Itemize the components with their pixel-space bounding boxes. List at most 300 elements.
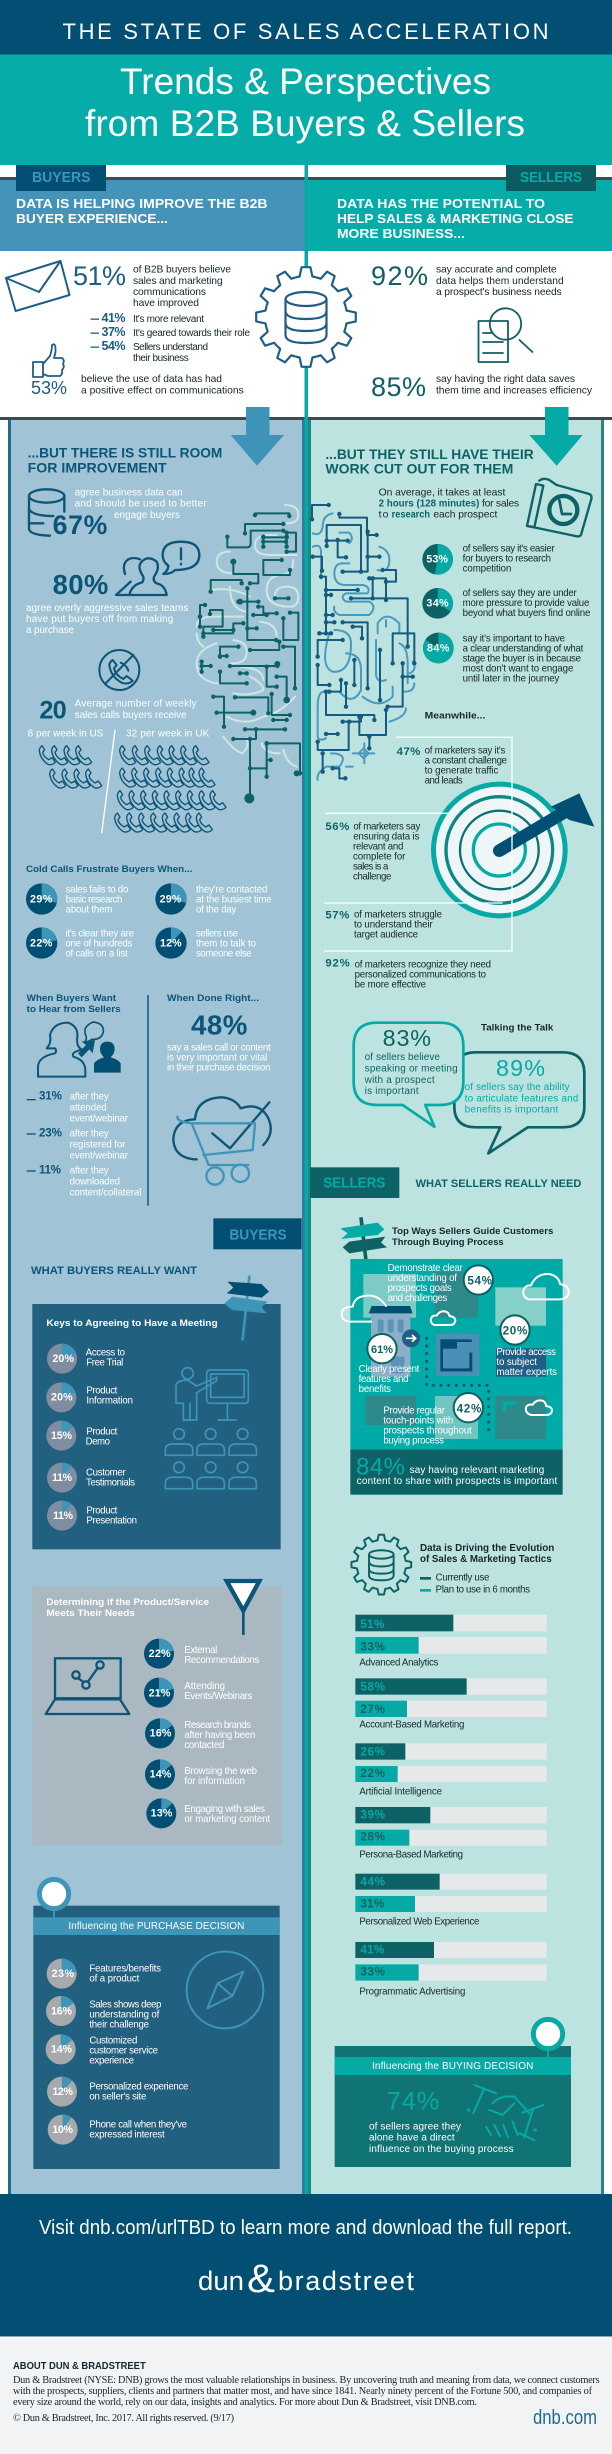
list: when to hear from sellers: event/webinar [70,1150,129,1161]
text: demonstrate understanding: and challenges [388,1293,448,1304]
pie: attending events: Events/Webinars [184,1691,253,1702]
pie: browsing the web: Browsing the web [184,1766,257,1777]
pie: deep understanding: Sales shows deep [89,2000,161,2011]
stat: 74 percent [369,2087,514,2155]
breakdown list: 54% [102,339,126,353]
bars: programmatic advertising: 41% [360,1944,385,1957]
about section: with the prospects, suppliers, clients and partners that matter most, and have since 1841. Nearly ninety percent of the Fortune 500, and companies of [13,2386,593,2397]
panel: influencing purchase decision [33,1879,280,2169]
strip: 84 percent: content to share with prospects is important [357,1476,558,1487]
pie: attending events [144,1678,253,1708]
stat: 20 weekly calls: 32 per week in UK [126,729,210,740]
stat: 57 percent: target audience [354,930,418,941]
icon: signpost teal [340,1217,387,1261]
heading: room for improvement: FOR IMPROVEMENT [28,460,167,476]
pie: 84 percent: 84% [427,642,450,654]
heading: when done right: When Done Right... [167,993,259,1003]
pie: 29 percent busiest [155,883,272,916]
title banner: from B2B Buyers & Sellers [85,103,525,144]
breakdown list: their business [133,353,189,364]
stat: 56 percent: ensuring data is [353,832,420,843]
badge: 61 percent: 61% [371,1344,393,1356]
icon: database [29,489,64,536]
pie: features: of a product [89,1974,140,1985]
stat: 67 percent: and should be used to better [75,499,207,510]
stat: 85 percent sellers: say having the right data saves [436,374,575,385]
icon: no calls [99,650,139,690]
icon: building [369,1306,413,1377]
pie: 22 percent list: of calls on a list [65,949,128,960]
navy label background [496,1348,546,1377]
heading: data driving evolution: of Sales & Marketing Tactics [420,1554,552,1565]
badge: 54 percent: 54% [467,1275,493,1288]
stat: 92 percent sellers: a prospect's business needs [436,287,562,298]
pie: product presentation: Product [86,1506,118,1517]
speech bubble: 89 percent: 89% [496,1055,545,1081]
bars: account-based marketing: Account-Based Marketing [359,1720,464,1731]
speech bubble: 83 percent: of sellers believe [365,1052,440,1063]
icon: target with dart [431,782,594,918]
pie: 53 percent [422,544,555,575]
pie: personalized site: Personalized experience [89,2082,188,2093]
dotted route [427,1338,489,1432]
stat: 74 percent: alone have a direct [369,2133,455,2144]
pie: external recommendations: 22% [149,1648,171,1660]
icons: 8 phones US [39,746,102,788]
panel: keys to meeting [32,1277,281,1549]
bars: artificial intelligence: 26% [360,1746,386,1759]
speech bubble: 89 percent: of sellers say the ability [465,1082,570,1093]
research time text: for sales [482,499,519,510]
research time text: to [379,510,389,521]
pie: research brands: contacted [184,1740,224,1751]
text: regular touch-points: buying process [383,1435,444,1446]
stat: 85 percent sellers: them time and increases efficiency [436,386,593,397]
stat: 74 percent: 74% [387,2087,439,2115]
text: regular touch-points: Provide regular [383,1405,446,1416]
pie: 29 percent busiest: they're contacted [196,885,267,896]
stat: 53 percent: believe the use of data has had [81,374,222,385]
stat: 47 percent: to generate traffic [425,766,499,777]
stat: 20 weekly calls [28,696,210,740]
stat: 56 percent [325,821,421,883]
list: when to hear from sellers: 31% [39,1089,63,1102]
pie: 53 percent: 53% [426,554,449,566]
bars: personalized web experience: Personalized Web Experience [359,1917,479,1928]
tag: buyers [213,1218,302,1249]
pie: 53 percent: competition [463,564,511,575]
stat: 51 percent buyers: have improved [133,298,199,309]
sellers heading band: DATA HAS THE POTENTIAL TO [337,196,545,211]
pie: 22 percent list [26,927,134,960]
stat: 56 percent: sales is a [353,862,389,873]
breakdown list [90,311,250,364]
icon: gear with database [256,267,356,367]
pie: 29 percent busiest: at the busiest time [196,895,272,906]
bars: artificial intelligence [355,1743,547,1798]
header: state of sales acceleration [0,0,612,54]
about section: dnb.com [533,2407,597,2429]
stat: 47 percent: a constant challenge [425,756,507,767]
icon: cloud and shopping cart [173,1097,271,1185]
pie: deep understanding [46,1996,161,2031]
icon: funnel sign [227,1581,259,1635]
pie: 34 percent: of sellers say they are under [463,588,577,599]
list: when to hear from sellers: registered for [70,1139,126,1150]
breakdown list: Sellers understand [133,342,208,353]
stat: 57 percent: of marketers struggle [354,910,442,921]
text: clearly present [359,1364,420,1395]
stat: 92 percent: of marketers recognize they need [355,960,491,971]
badge: 61 percent [367,1334,397,1363]
bars: personalized web experience: 44% [360,1876,386,1889]
strip: 84 percent: 84% [356,1453,405,1480]
heading: when buyers want to hear [27,993,121,1014]
list: when to hear from sellers [27,1089,141,1198]
pie: product information: Information [86,1396,133,1407]
stat: 53 percent: a positive effect on communications [81,386,244,397]
bars: account-based marketing [355,1678,547,1731]
stat: 67 percent: engage buyers [114,510,180,521]
pie: 84 percent: most don't want to engage [463,664,573,675]
badge: 20 percent [500,1315,530,1345]
pie: 29 percent research [26,883,128,916]
pie: features: Features/benefits [89,1964,161,1975]
breakdown list: It's geared towards their role [133,328,250,339]
icons: 32 phones UK [115,746,226,832]
strip: 84 percent: say having relevant marketing [410,1465,544,1476]
text: demonstrate understanding: understanding of [388,1273,457,1284]
heading: when buyers want to hear: to Hear from Sellers [27,1004,121,1014]
stat: 92 percent sellers [371,261,564,298]
pie: personalized site: on seller's site [89,2092,146,2103]
pie: browsing the web [145,1759,257,1789]
heading: top ways: Through Buying Process [392,1237,504,1247]
sellers heading band [308,165,612,251]
about section: Dun & Bradstreet (NYSE: DNB) grows the most valuable relationships in business. By uncovering truth and meaning from data, we connect customers [13,2375,600,2386]
stat: 92 percent sellers: data helps them understand [436,276,564,287]
bars: programmatic advertising: 33% [360,1966,386,1979]
stat: 51 percent buyers: communications [133,287,206,298]
header: state of sales acceleration: THE STATE OF SALES ACCELERATION [62,19,548,44]
pie: research brands [145,1718,255,1751]
pie: product information: 20% [51,1392,73,1404]
pie: customer service: 14% [51,2044,73,2056]
pie: product presentation: 11% [53,1510,74,1522]
logo: dun and bradstreet [198,2257,414,2301]
icon: handshake [468,2085,543,2140]
speech bubble: 83 percent: speaking or meeting [365,1063,458,1074]
pie: customer testimonials: 11% [52,1472,73,1484]
bars: advanced analytics [355,1615,547,1669]
breakdown list: It's more relevant [133,314,204,325]
pie: phone call: Phone call when they've [89,2120,187,2131]
pie: 29 percent research: 29% [30,894,53,906]
stat: 48 percent [167,1009,271,1074]
stat: 67 percent [53,488,207,540]
right column block 4 [335,1678,571,2167]
panel: determining if product meets needs: Meets Their Needs [46,1608,135,1618]
stat: 92 percent: 92% [325,958,350,970]
list: when to hear from sellers: after they [70,1128,109,1139]
stat: 48 percent: say a sales call or content [167,1043,271,1054]
about section: © Dun & Bradstreet, Inc. 2017. All rights reserved. (9/17) [13,2413,234,2424]
heading: when buyers want to hear: When Buyers Want [27,993,116,1003]
pie: free trial: Free Trial [86,1358,123,1369]
heading: data driving evolution [420,1543,554,1565]
pie: engaging with content: 13% [151,1808,173,1820]
pie: customer service: customer service [89,2046,158,2057]
stat: 74 percent: influence on the buying process [369,2144,514,2155]
icon: circuit brain right [312,505,415,780]
panel title: Determining if the Product/Service [46,1597,209,1607]
pie: phone call: 10% [52,2124,74,2136]
list: when to hear from sellers: content/collateral [70,1187,141,1198]
icon: arrow circle [402,1329,420,1347]
logo: dun and bradstreet: dun [198,2266,244,2296]
heading: data driving evolution: Data is Driving the Evolution [420,1543,554,1554]
pie: product presentation: Presentation [86,1516,137,1527]
speech bubble: 83 percent: is important [365,1086,419,1097]
buyers heading band [0,165,304,251]
research time text: On average, it takes at least [379,488,505,499]
section dividers [0,417,612,420]
stat: 56 percent: complete for [353,852,406,863]
text: clearly present: Clearly present [359,1364,420,1375]
bars: persona-based marketing: Persona-Based Marketing [359,1850,463,1861]
icon: magnifier and document [478,308,532,362]
list: when to hear from sellers: 23% [39,1126,63,1139]
pie: browsing the web: for information [184,1776,245,1787]
stat: 51 percent buyers: sales and marketing [133,276,223,287]
about section: every size around the world, rely on our data, insights and analytics. For more about Dun & Bradstreet, visit DNB.com. [13,2397,477,2408]
heading: top ways: Top Ways Sellers Guide Customers [392,1226,553,1236]
pie: 84 percent: a clear understanding of what [463,644,584,655]
pie: 29 percent busiest: of the day [196,905,237,916]
stat: 53 percent: 53% [31,378,67,398]
stat: 47 percent: 47% [397,746,420,758]
stat: 20 weekly calls: sales calls buyers receive [75,710,187,721]
pie: phone call: expressed interest [89,2130,165,2141]
legend [420,1573,530,1596]
stat: 74 percent: of sellers agree they [369,2122,461,2133]
bars: account-based marketing: 27% [360,1703,386,1716]
speech bubble: 83 percent [354,1023,463,1127]
pie: 84 percent: stage the buyer is in because [463,654,581,665]
panel: influencing buying decision [335,2019,571,2167]
bars: personalized web experience: 31% [360,1897,385,1910]
pie: personalized site [47,2077,188,2107]
badge: 20 percent: 20% [503,1325,528,1338]
icon: compass [187,1952,263,2028]
heading: work cut out [325,446,534,477]
legend: Currently use [436,1573,489,1584]
text: demonstrate understanding: Demonstrate clear [388,1263,463,1274]
breakdown list: 41% [102,311,126,325]
pie: customer testimonials: Customer [86,1468,126,1479]
pie: external recommendations [144,1639,260,1669]
text: demonstrate understanding: prospects goals [388,1283,452,1294]
icon: woman, speech bubble, person [38,1022,121,1077]
stat: 20 weekly calls: 8 per week in US [28,729,104,740]
list: when to hear from sellers: event/webinar [70,1113,129,1124]
bars: advanced analytics: Advanced Analytics [359,1658,439,1669]
badge: 54 percent [464,1265,493,1295]
pie: research brands: Research brands [184,1720,251,1731]
pie: features [47,1959,161,1989]
stat: 51 percent buyers: of B2B buyers believe [133,265,231,276]
icon: presenter with audience [176,1368,248,1421]
logo: dun and bradstreet: bradstreet [278,2266,414,2296]
stat: 92 percent [325,958,491,991]
pie: 12 percent someone else [155,927,256,960]
badge: 42 percent: 42% [457,1402,482,1415]
stat: 53 percent [31,374,244,398]
pie: 29 percent research: sales fails to do [66,885,128,896]
frame lines [324,737,512,951]
pie: engaging with content: or marketing content [184,1814,270,1825]
icon: people and speech bubble [116,542,199,595]
panel title: Keys to Agreeing to Have a Meeting [46,1318,218,1328]
heading: room for improvement [28,445,222,476]
stat: 92 percent sellers: 92% [371,261,428,291]
stat: 56 percent: relevant and [353,842,403,853]
stat: 47 percent: and leads [425,776,463,787]
icons: audience [165,1429,256,1489]
icon: thumbs up [33,344,64,377]
pie: 12 percent someone else: sellers use [196,929,238,940]
pie: attending events: 21% [149,1687,171,1699]
pie: free trial: 20% [52,1353,75,1365]
divider slash [102,730,115,833]
arrow: sellers down [529,407,583,466]
stat: 47 percent [397,746,507,787]
stat: 56 percent: 56% [325,821,349,833]
buyers heading band: DATA IS HELPING IMPROVE THE B2B [16,196,268,211]
pie: 29 percent research: about them [66,905,112,916]
bars: programmatic advertising: Programmatic Advertising [359,1987,465,1998]
research time text: research [392,510,430,521]
strip title: Influencing the BUYING DECISION [372,2061,533,2072]
icon: laptop with network [46,1658,129,1714]
bars: account-based marketing: 58% [360,1681,386,1694]
left column block 2 [26,864,302,1249]
icon: gear database teal [351,1535,411,1595]
bars: advanced analytics: 51% [360,1618,385,1631]
stat: 57 percent [325,910,442,941]
right column block 1 [312,446,592,780]
list: when to hear from sellers: after they [70,1091,109,1102]
research time text [379,488,519,521]
list: when to hear from sellers: attended [70,1102,107,1113]
sellers heading band: MORE BUSINESS... [337,226,465,241]
stat: 67 percent: agree business data can [75,488,183,499]
heading: talking the talk: Talking the Talk [481,1023,554,1033]
heading: what sellers really need: WHAT SELLERS REALLY NEED [416,1178,581,1190]
pie: 53 percent: of sellers say it's easier [463,544,555,555]
panel: determining if product meets needs [32,1581,282,1845]
sellers heading band: HELP SALES & MARKETING CLOSE [337,211,574,226]
left column block 3 [31,1265,282,1845]
pie: phone call [48,2115,187,2145]
text: subject matter experts [496,1347,557,1378]
pie: external recommendations: Recommendations [184,1655,260,1666]
stat: 80 percent: 80% [53,569,108,600]
stat: 92 percent: personalized communications to [355,970,486,981]
text: clearly present: benefits [359,1384,391,1395]
bars: persona-based marketing: 39% [360,1809,386,1822]
icon: circuit brain left [197,505,300,803]
stat: 85 percent sellers: 85% [371,372,426,402]
pie: customer service: experience [89,2056,134,2067]
stat: 48 percent: 48% [191,1009,247,1040]
pie: deep understanding: understanding of [89,2010,160,2021]
pie: 12 percent someone else: someone else [196,949,252,960]
icon: pin [39,1879,69,1917]
heading: cold calls: Cold Calls Frustrate Buyers When... [26,864,192,874]
pie: 53 percent: for buyers to research [463,554,551,565]
list: when to hear from sellers: 11% [39,1163,62,1176]
bars: persona-based marketing: 28% [360,1831,386,1844]
pie: product demo: Product [86,1427,118,1438]
stat: 20 weekly calls: Average number of weekly [75,699,197,710]
icon: envelope [6,261,70,311]
stat: 48 percent: is very important or vital [167,1053,267,1064]
research time text: each prospect [433,510,497,521]
footer call to action: Visit dnb.com/urlTBD to learn more and download the full report. [39,2217,572,2239]
pie: 12 percent someone else: them to talk to [196,939,256,950]
heading: top ways [392,1226,553,1247]
sellers heading band: SELLERS [520,169,582,186]
pie: deep understanding: 16% [51,2005,73,2017]
pie: browsing the web: 14% [150,1769,172,1781]
breakdown list: 37% [102,325,126,339]
pie: 84 percent: say it's important to have [463,634,565,645]
tag: sellers [310,1167,399,1198]
pie: product presentation [47,1501,137,1531]
stat: 80 percent: agree overly aggressive sales teams [26,603,188,614]
text: subject matter experts: matter experts [496,1367,557,1378]
pie: product demo: Demo [86,1437,110,1448]
bars: persona-based marketing [355,1807,547,1861]
buyers heading band: BUYER EXPERIENCE... [16,211,168,226]
stat: 80 percent [26,569,188,636]
stat: 47 percent: of marketers say it's [425,746,506,757]
stat: 80 percent: a purchase [26,625,74,636]
bars: artificial intelligence: 22% [360,1767,386,1780]
strip title: Influencing the PURCHASE DECISION [68,1921,244,1932]
text: clearly present: features and [359,1374,408,1385]
icon: signpost [224,1277,269,1339]
bars: programmatic advertising [355,1942,547,1998]
text: subject matter experts: Provide access [496,1347,556,1358]
stat: 51 percent buyers [73,261,231,309]
pie: 29 percent research: basic research [66,895,122,906]
pie: customer service [46,2034,158,2067]
pie: product demo: 15% [51,1430,73,1442]
strip: 84 percent [350,1449,563,1495]
pie: 34 percent: more pressure to provide value [463,598,589,609]
pie: 34 percent: 34% [426,598,449,610]
bars: artificial intelligence: Artificial Intelligence [359,1787,442,1798]
text: regular touch-points: touch-points with [383,1415,453,1426]
pie: engaging with content: Engaging with sales [184,1804,265,1815]
heading: work cut out: ...BUT THEY STILL HAVE THEIR [325,446,534,462]
bars: personalized web experience [355,1874,547,1928]
right column block 2 [310,737,594,1261]
pie: 12 percent someone else: 12% [160,938,182,950]
title banner: Trends & Perspectives [120,61,491,102]
